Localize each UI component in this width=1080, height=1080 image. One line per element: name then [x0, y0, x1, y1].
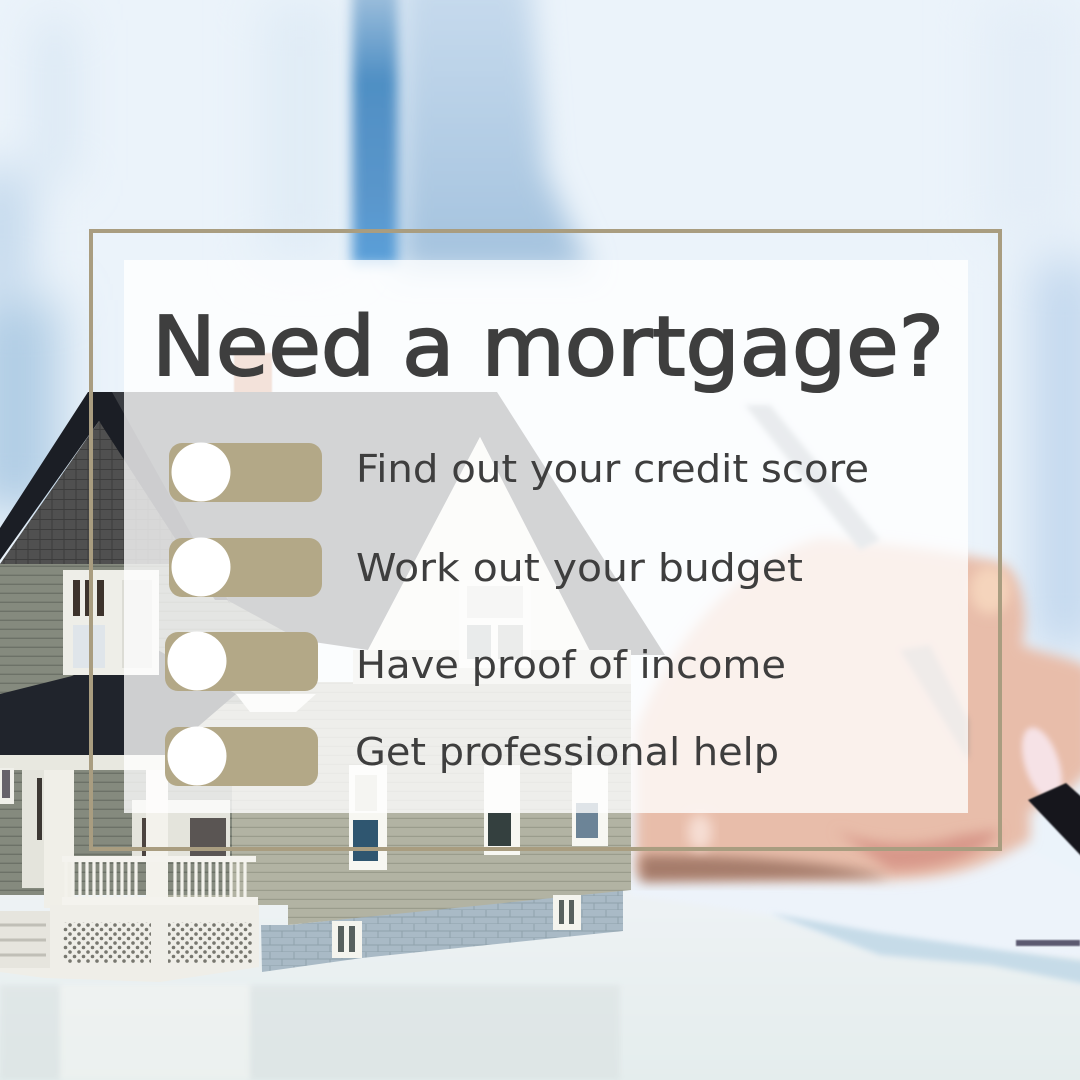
hand [636, 538, 1080, 880]
item 2: toggle icon [169, 538, 322, 597]
blurred pen top [745, 405, 880, 550]
steps [0, 911, 50, 968]
porch back wall [0, 770, 232, 895]
porch columns [44, 770, 74, 908]
fingernail [1014, 723, 1070, 805]
item 4: toggle icon [165, 726, 318, 786]
door [22, 770, 44, 888]
table surface [0, 885, 1080, 1080]
eave trim [353, 650, 631, 684]
table reflection [0, 985, 620, 1080]
translucent white panel [124, 260, 968, 813]
main roof [100, 392, 665, 655]
main wall [288, 682, 631, 925]
left roof slope [0, 392, 228, 600]
blurred dark blue tie band [352, 0, 398, 265]
title: Need a mortgage? [152, 300, 944, 395]
paper [630, 850, 1080, 958]
upper left wall [0, 564, 290, 704]
porch beam [0, 755, 170, 772]
gold frame [91, 231, 1000, 849]
left gable shingles [0, 421, 230, 604]
fingernail reflection on hand [688, 814, 712, 850]
fingertip highlight [970, 566, 1010, 614]
item 1: toggle icon [169, 442, 322, 502]
item 2: text: Work out your budget [356, 546, 803, 590]
pen shadow on the hand [900, 645, 968, 760]
basement windows [332, 895, 581, 958]
chimney [234, 353, 272, 395]
porch roof [0, 640, 236, 755]
side wall [160, 690, 295, 905]
item 3: text: Have proof of income [356, 643, 786, 687]
item 3: toggle icon [165, 632, 318, 691]
model house [0, 353, 665, 1080]
porch window [132, 800, 230, 862]
hand shadow [640, 855, 890, 882]
front gable wall [368, 437, 592, 655]
foundation [261, 888, 623, 972]
gable window [459, 580, 531, 668]
wall windows [349, 765, 608, 870]
paper print [1016, 940, 1080, 946]
blue wedge beside the tie [400, 0, 590, 270]
pen [1028, 783, 1080, 860]
porch base lattice [0, 905, 259, 982]
item 4: text: Get professional help [355, 730, 779, 774]
gable front white beam [236, 694, 316, 712]
railing [66, 860, 245, 903]
paper shadow [770, 913, 1080, 985]
item 1: text: Find out your credit score [356, 447, 869, 491]
upper window [63, 570, 159, 675]
